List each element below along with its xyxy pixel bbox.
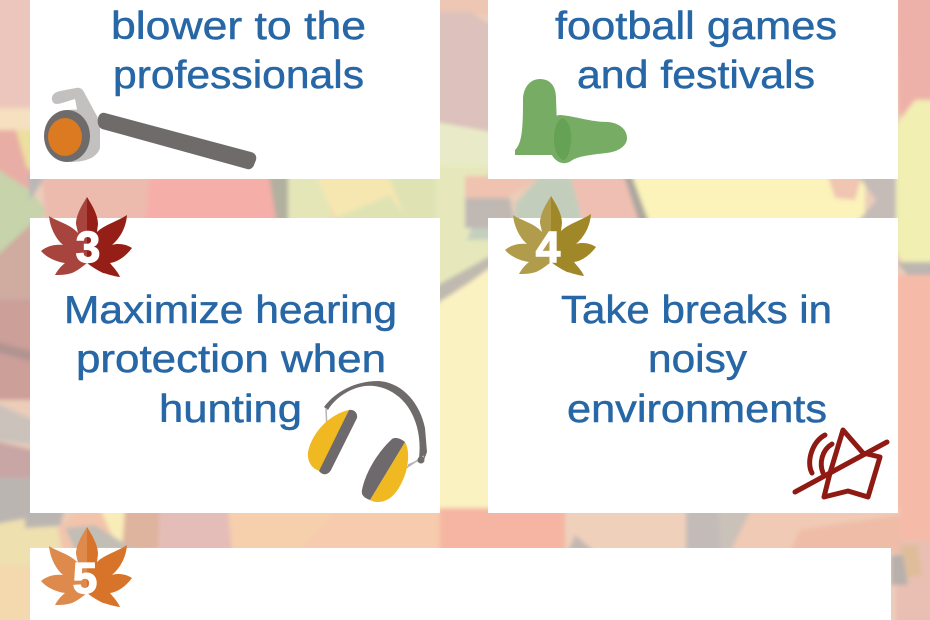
badge: leaf 5 <box>41 527 132 607</box>
heading: card 3 text: Maximize hearing <box>64 289 397 332</box>
heading: card 4 text: Take breaks in <box>561 289 832 332</box>
panel: card 4 <box>488 218 898 513</box>
icon: leaf blower <box>44 88 256 169</box>
panel: card 3 <box>30 218 440 513</box>
icon: ear plugs <box>515 79 627 163</box>
heading: card 3 text <box>64 289 397 431</box>
heading: card 4 text: environments <box>567 388 827 431</box>
heading: card 1 text <box>111 5 366 97</box>
badge: leaf 3: 3 <box>76 223 100 272</box>
heading: card 2 text: and festivals <box>577 54 815 97</box>
icon: ear muffs <box>308 381 427 502</box>
badge: leaf 5: 5 <box>73 554 97 603</box>
heading: card 2 text <box>555 5 837 97</box>
heading: card 3 text: protection when <box>76 338 386 381</box>
panel: card 5 <box>30 548 891 620</box>
heading: card 1 text: blower to the <box>111 5 366 48</box>
badge: leaf 4: 4 <box>536 223 561 272</box>
icon: muted speaker <box>795 430 887 497</box>
panel: card 2 <box>488 0 898 179</box>
badge: leaf 3 <box>41 197 132 277</box>
heading: card 1 text: professionals <box>113 54 364 97</box>
heading: card 4 text: noisy <box>648 338 748 381</box>
panel: card 1 <box>30 0 440 179</box>
badge: leaf 4 <box>505 196 596 276</box>
heading: card 2 text: football games <box>555 5 837 48</box>
heading: card 3 text: hunting <box>159 388 302 431</box>
heading: card 4 text <box>561 289 832 431</box>
